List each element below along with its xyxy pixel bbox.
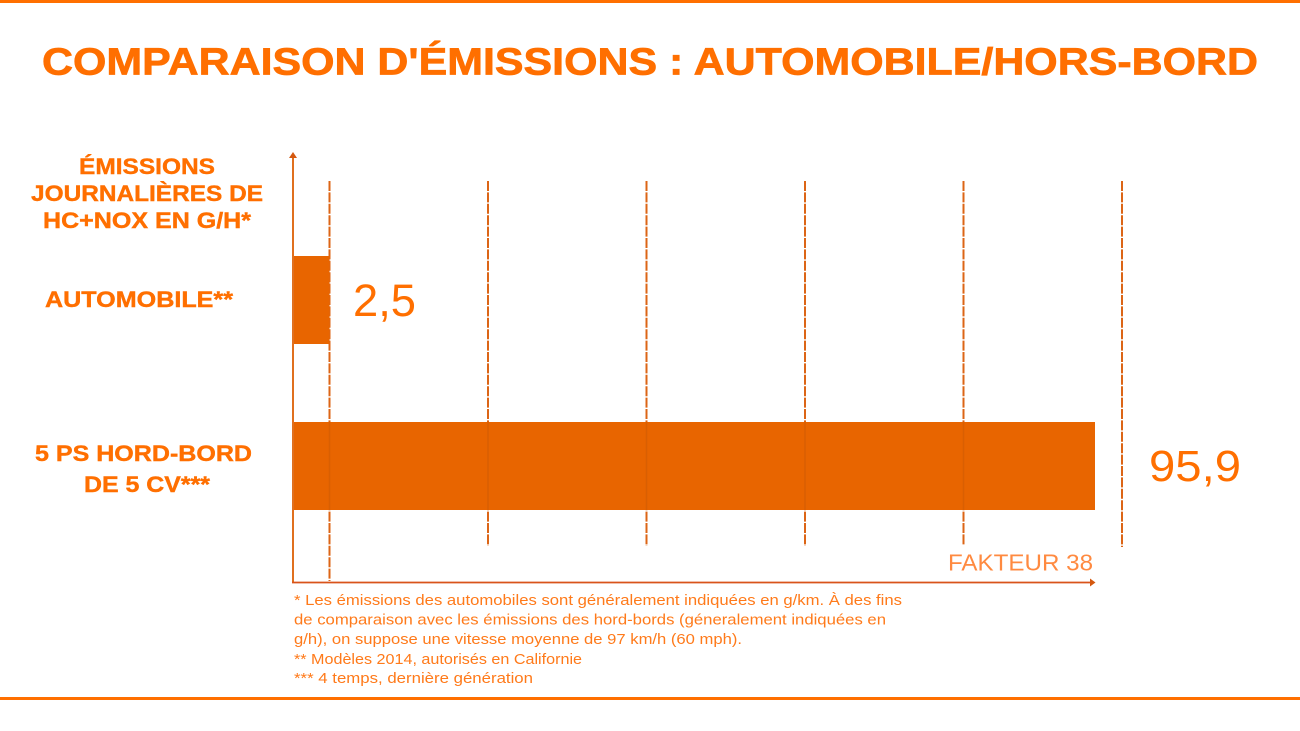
value: hors-bord: 95,9 — [1149, 442, 1241, 491]
footnotes — [294, 592, 902, 687]
bottom border — [0, 697, 1300, 700]
label: hors-bord: DE 5 CV*** — [84, 472, 210, 497]
axis heading: HC+NOX EN G/H* — [43, 208, 251, 233]
gridlines seen through bars — [330, 422, 964, 510]
label: hors-bord: 5 PS HORD-BORD — [35, 441, 252, 466]
bar: automobile — [293, 256, 330, 344]
label: automobile: AUTOMOBILE** — [45, 287, 233, 312]
footnotes: g/h), on suppose une vitesse moyenne de 97 km/h (60 mph). — [294, 632, 742, 648]
top border — [0, 0, 1300, 3]
title: COMPARAISON D'ÉMISSIONS : AUTOMOBILE/HORS-BORD — [42, 40, 1258, 84]
footnotes: de comparaison avec les émissions des hord-bords (géneralement indiquées en — [294, 612, 886, 628]
label: hors-bord — [35, 441, 252, 497]
bar: hors-bord — [293, 422, 1095, 510]
footnotes: * Les émissions des automobiles sont généralement indiquées en g/km. À des fins — [294, 592, 902, 609]
gridlines — [330, 181, 1122, 581]
vertical axis arrow — [289, 152, 297, 583]
value: automobile: 2,5 — [353, 275, 416, 326]
horizontal axis arrow — [292, 578, 1096, 586]
footnotes: ** Modèles 2014, autorisés en Californie — [294, 652, 582, 668]
footnotes: *** 4 temps, dernière génération — [294, 671, 533, 687]
axis heading: JOURNALIÈRES DE — [31, 181, 263, 206]
axis heading — [31, 154, 263, 233]
axis heading: ÉMISSIONS — [79, 154, 215, 179]
factor label: FAKTEUR 38 — [948, 550, 1093, 576]
